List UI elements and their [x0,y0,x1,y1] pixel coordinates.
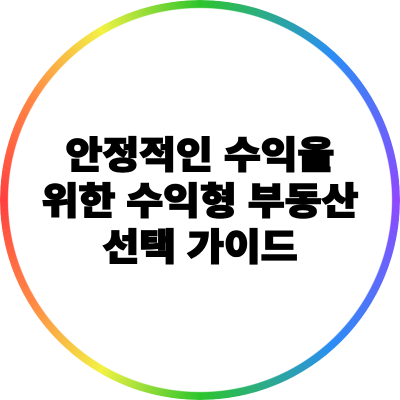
title [42,136,358,268]
title: 안정적인 수익을 [66,136,334,176]
title: 선택 가이드 [102,228,298,268]
title: 위한 수익형 부동산 [42,182,358,222]
